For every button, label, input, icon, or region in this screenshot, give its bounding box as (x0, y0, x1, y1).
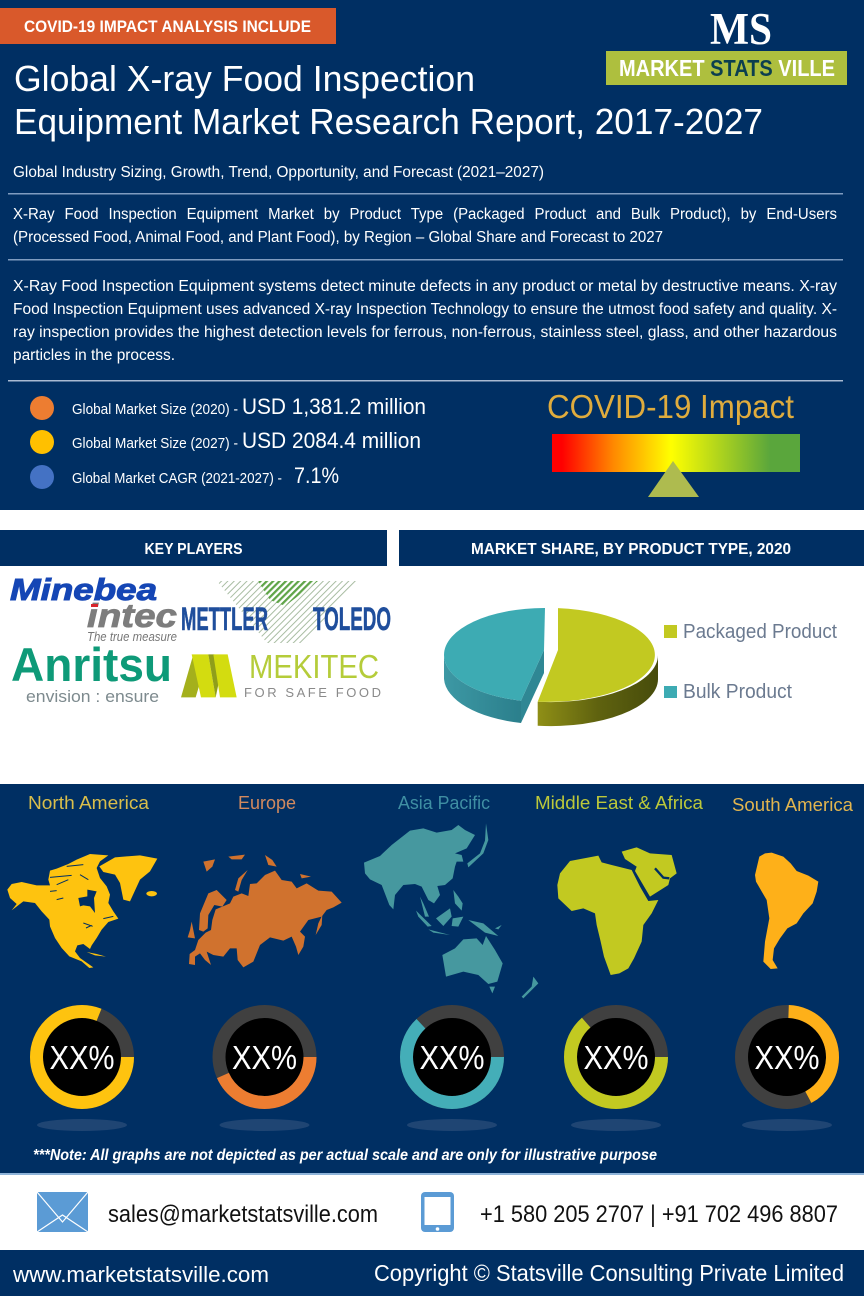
donut: Asia Pacific: XX% (420, 1039, 484, 1076)
email: sales@marketstatsville.com (108, 1201, 378, 1228)
donut: Europe: XX% (232, 1039, 297, 1076)
logo: Mettler Toledo: METTLER (181, 601, 268, 637)
logo: Mekitec: MEKITEC (249, 648, 379, 685)
description text: X-Ray Food Inspection Equipment systems detect minute defects in any product or metal by destructive means. X-ray (13, 278, 837, 295)
note: ***Note: All graphs are not depicted as per actual scale and are only for illustrative purpose (33, 1147, 657, 1164)
panel: header (0, 0, 864, 510)
logo: intec: intec (87, 597, 177, 634)
panel: footer (0, 1250, 864, 1296)
logo: Market Stats Ville (606, 4, 847, 85)
covid-19 impact gauge (547, 388, 800, 497)
description text: particles in the process. (13, 347, 175, 364)
heading: key players: KEY PLAYERS (144, 541, 243, 558)
region: South America (732, 794, 854, 969)
pie slice: packaged product (538, 608, 658, 726)
legend: Bulk Product (683, 681, 792, 703)
stat: CAGR: 7.1% (294, 463, 339, 488)
covid-19 impact gauge: COVID-19 Impact (547, 388, 794, 425)
market segmentation text: X-Ray Food Inspection Equipment Market by Product Type (Packaged Product and Bulk Product), by End-Users (13, 206, 837, 223)
heading: key players (0, 530, 387, 566)
region: North America: North America (28, 792, 150, 813)
stat: CAGR: Global Market CAGR (2021-2027) - (72, 471, 282, 487)
logo: Anritsu: envision : ensure (26, 687, 159, 706)
panel: contact bar (0, 1173, 864, 1232)
subtitle: Global Industry Sizing, Growth, Trend, Opportunity, and Forecast (2021–2027) (13, 164, 544, 181)
market segmentation text: (Processed Food, Animal Food, and Plant Food), by Region – Global Share and Forecast to 2027 (13, 229, 663, 246)
title: Global X-ray Food Inspection (14, 58, 475, 99)
title: Equipment Market Research Report, 2017-2027 (14, 101, 763, 142)
donut: Middle East and Africa: XX% (584, 1039, 648, 1076)
panel: regions (0, 784, 864, 1173)
legend: Packaged Product (683, 621, 837, 643)
stat: market size 2027: Global Market Size (2027) - (72, 436, 238, 452)
region: Middle East and Africa (535, 792, 704, 975)
logo: Mekitec (181, 648, 381, 700)
description text: Food Inspection Equipment uses advanced X-ray Inspection Technology to ensure the utmost food safety and quality. X- (13, 301, 837, 318)
heading: market share (399, 530, 864, 566)
phone numbers: +1 580 205 2707 | +91 702 496 8807 (480, 1201, 838, 1228)
website: www.marketstatsville.com (12, 1262, 269, 1287)
logo: Anritsu: Anritsu (11, 638, 172, 691)
stat: market size 2020 (30, 394, 426, 420)
stat: CAGR (30, 463, 339, 489)
legend (664, 621, 837, 703)
heading: market share: MARKET SHARE, BY PRODUCT TYPE, 2020 (471, 541, 791, 558)
donut: Middle East and Africa (570, 1012, 662, 1131)
logo: Mettler Toledo: TOLEDO (313, 601, 391, 637)
logo: Mekitec: FOR SAFE FOOD (244, 685, 381, 700)
region: Asia Pacific: Asia Pacific (398, 792, 490, 813)
region: Middle East and Africa: Middle East & Africa (535, 792, 704, 813)
logo: Market Stats Ville: MARKET STATS VILLE (619, 55, 835, 81)
logo: intec (87, 597, 177, 644)
stat: market size 2020: USD 1,381.2 million (242, 394, 426, 419)
donut: South America: XX% (754, 1039, 820, 1076)
pie slice: bulk product (444, 608, 545, 723)
covid banner: COVID-19 IMPACT ANALYSIS INCLUDE (24, 17, 311, 36)
region: Asia Pacific (364, 792, 538, 998)
region: South America: South America (732, 794, 854, 815)
stat: market size 2020: Global Market Size (2020) - (72, 402, 238, 418)
description text (13, 278, 837, 364)
description text: ray inspection provides the highest detection levels for ferrous, non-ferrous, stainless steel, glass, and other hazardous (13, 324, 837, 341)
title (14, 58, 763, 142)
logo: Mettler Toledo (181, 581, 391, 643)
logo: Market Stats Ville: MS (710, 4, 772, 54)
logo: intec: The true measure (87, 630, 177, 644)
region: North America (7, 792, 157, 968)
donut: South America (740, 1010, 834, 1131)
icon: envelope (37, 1192, 88, 1232)
panel: pie chart (444, 608, 837, 726)
donut: Asia Pacific (406, 1012, 498, 1131)
panel: key player logos (10, 572, 391, 706)
stat: market size 2027: USD 2084.4 million (242, 428, 421, 453)
region: Europe (188, 792, 342, 967)
donut: Europe (219, 1012, 310, 1131)
market segmentation text (13, 206, 837, 246)
covid banner (0, 8, 336, 44)
copyright: Copyright © Statsville Consulting Private Limited (374, 1260, 844, 1286)
region: Europe: Europe (238, 792, 296, 813)
logo: Minebea: Minebea (10, 572, 157, 607)
icon: phone (421, 1192, 454, 1232)
donut: North America (36, 1012, 128, 1131)
donut: North America: XX% (50, 1039, 114, 1076)
key statistics (30, 394, 426, 489)
stat: market size 2027 (30, 428, 421, 454)
